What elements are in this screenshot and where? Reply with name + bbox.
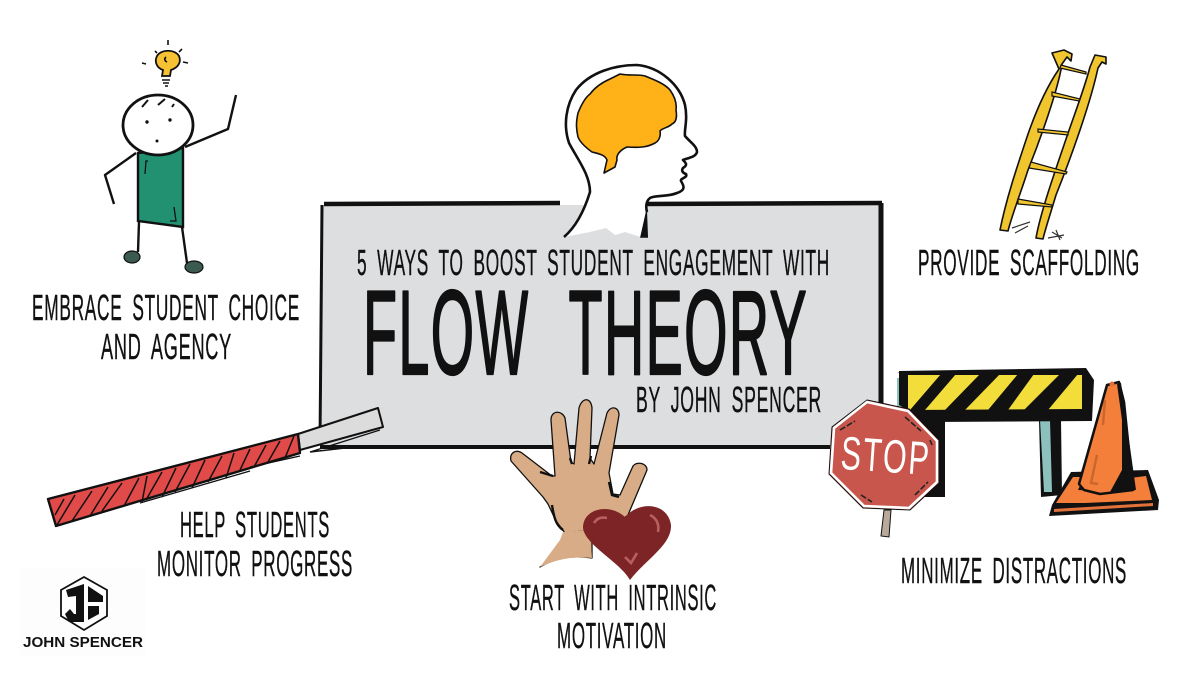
text: embrace student choice: AND AGENCY [101, 326, 232, 367]
heart [583, 506, 671, 580]
post [881, 510, 891, 537]
feet [124, 251, 140, 263]
panel: title board [320, 203, 882, 447]
legs [897, 372, 945, 497]
icon: stop sign [829, 400, 939, 537]
text: help students monitor progress: HELP STUDENTS [180, 504, 330, 545]
brain [576, 74, 677, 173]
icon: head with brain [564, 65, 697, 237]
barrier board [899, 368, 1094, 422]
limbs [105, 95, 236, 263]
icon: traffic cone [1049, 382, 1159, 516]
icon: road barrier [897, 368, 1094, 497]
text: MONITOR PROGRESS [157, 543, 353, 584]
text: EMBRACE STUDENT CHOICE [32, 287, 300, 328]
panel: title board: BY JOHN SPENCER [636, 379, 822, 420]
head [123, 95, 193, 155]
icon: ladder [1000, 50, 1106, 240]
logo: john spencer: JOHN SPENCER [23, 635, 144, 651]
icon: hand [511, 400, 671, 580]
icon: js hexagon [61, 577, 107, 630]
icon: progress bar [48, 408, 383, 526]
icon: light bulb [142, 40, 188, 86]
text: start with intrinsic motivation: MOTIVATION [557, 615, 667, 656]
logo: john spencer [20, 568, 146, 656]
text: start with intrinsic motivation [509, 577, 717, 656]
shirt [138, 148, 183, 227]
text: help students monitor progress [157, 504, 353, 584]
stop label: STOP [839, 426, 933, 485]
icon: stick figure with light bulb [105, 40, 236, 273]
text: START WITH INTRINSIC [509, 577, 717, 618]
text: embrace student choice [32, 287, 300, 367]
